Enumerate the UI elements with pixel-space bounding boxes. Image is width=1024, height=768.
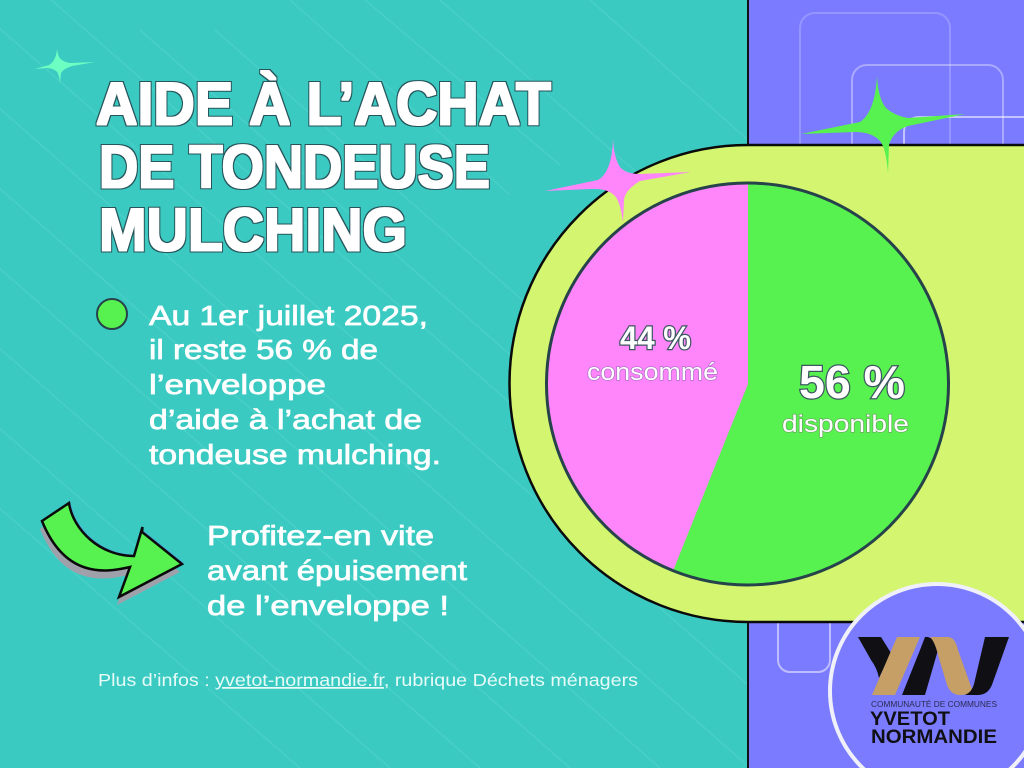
icon: mint sparkle [35, 49, 95, 83]
logo badge: COMMUNAUTÉ DE COMMUNES [871, 700, 997, 709]
logo mark [858, 637, 1009, 695]
title: AIDE À L’ACHAT [96, 70, 551, 138]
footer text: Plus d’infos : yvetot-normandie.fr , rubrique Déchets ménagers [98, 670, 638, 690]
icon: curved arrow [40, 502, 184, 605]
title: DE TONDEUSE [99, 134, 490, 200]
lime rounded band [509, 145, 1024, 622]
label: 56 % disponible: disponible [782, 411, 909, 438]
text block: call to action [207, 520, 467, 621]
label: 56 % disponible: 56 % [799, 356, 905, 408]
text block: remaining budget: tondeuse mulching. [149, 439, 441, 470]
title: MULCHING [99, 196, 407, 264]
text block: remaining budget: Au 1er juillet 2025, [149, 300, 428, 331]
icon: pink sparkle [545, 139, 691, 222]
label: 44 % consommé [587, 320, 718, 386]
logo badge: YVETOT [870, 709, 950, 730]
icon: green bullet [97, 299, 127, 329]
label: 56 % disponible [782, 356, 909, 438]
icon: green sparkle [801, 76, 965, 173]
label: 44 % consommé: consommé [587, 359, 718, 386]
text block: remaining budget: il reste 56 % de [149, 334, 378, 365]
text block: call to action: avant épuisement [207, 555, 467, 586]
panel: purple background [748, 0, 1024, 768]
text block: call to action: Profitez-en vite [207, 520, 434, 551]
text block: call to action: de l’enveloppe ! [207, 590, 449, 621]
label: 44 % consommé: 44 % [620, 320, 691, 356]
text block: remaining budget: l’enveloppe [149, 369, 326, 400]
logo badge [830, 584, 1024, 768]
text block: remaining budget [149, 300, 441, 470]
logo badge: NORMANDIE [871, 727, 997, 748]
title [96, 70, 551, 264]
pie chart [546, 183, 948, 585]
text block: remaining budget: d’aide à l’achat de [149, 404, 422, 435]
